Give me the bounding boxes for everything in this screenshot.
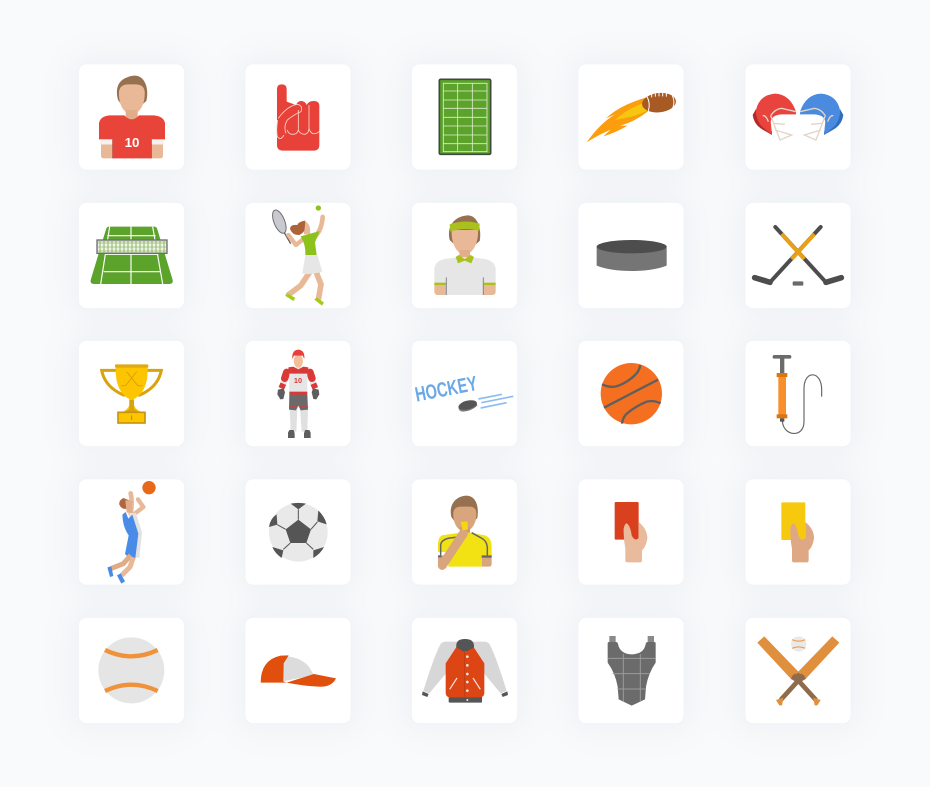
icon: gold trophy: [102, 364, 161, 423]
card panel: [245, 340, 351, 446]
card panel: [412, 479, 518, 585]
icon: varsity jacket: [422, 639, 508, 703]
card panel: [412, 618, 518, 724]
card: varsity jacket: [412, 618, 518, 724]
card panel: [245, 618, 351, 724]
icon: air pump: [773, 355, 822, 433]
card: yellow card in hand: [745, 479, 851, 585]
icon: red card in hand: [615, 502, 647, 562]
card panel: [745, 340, 851, 446]
card: tennis player: [245, 202, 351, 308]
icon: tennis man: [434, 215, 496, 295]
card panel: [578, 340, 684, 446]
card: american football field: [412, 64, 518, 170]
card panel: [245, 202, 351, 308]
card panel: [578, 64, 684, 170]
card panel: [412, 202, 518, 308]
card: foam finger: [245, 64, 351, 170]
icon: soccer ball: [269, 503, 328, 562]
card panel: [745, 618, 851, 724]
card: basketball player jumping: [78, 479, 184, 585]
icon: baseball: [98, 637, 164, 703]
card panel: [78, 479, 184, 585]
icon: crossed bats and ball: [757, 636, 839, 705]
icon: basketball: [601, 363, 662, 424]
card: red and blue helmets: [745, 64, 851, 170]
card: air pump: [745, 340, 851, 446]
icon: foam finger: [277, 84, 319, 151]
icon: basketball player: [107, 481, 156, 584]
card: gold trophy: [78, 340, 184, 446]
icon: hockey puck: [597, 240, 667, 271]
card panel: [78, 340, 184, 446]
card: basketball: [578, 340, 684, 446]
card panel: [745, 202, 851, 308]
icon: crossed hockey sticks: [755, 227, 841, 286]
card panel: [245, 479, 351, 585]
icon: baseball cap: [261, 655, 336, 687]
icon: referee: [438, 496, 492, 567]
card panel: [578, 618, 684, 724]
card panel: [412, 64, 518, 170]
icon: helmets: [753, 94, 843, 140]
card: crossed baseball bats: [745, 618, 851, 724]
card panel: [578, 479, 684, 585]
icon: chest protector: [608, 636, 656, 706]
soft halos behind cards: [66, 52, 863, 735]
card: hockey lettering and puck: [412, 340, 518, 446]
card panel: [78, 202, 184, 308]
blue helmet: [800, 94, 843, 140]
card panel: [745, 64, 851, 170]
card panel: [78, 64, 184, 170]
card: red card in hand: [578, 479, 684, 585]
icon: tennis player: [270, 205, 324, 306]
card panel: [245, 64, 351, 170]
icon: flaming football: [587, 91, 677, 142]
icon: red jersey player: 10: [125, 135, 139, 150]
card: flaming football: [578, 64, 684, 170]
card: tennis court: [78, 202, 184, 308]
card panel: [745, 479, 851, 585]
icon: tennis court: [91, 227, 173, 284]
card: hockey player: [245, 340, 351, 446]
card: catcher's chest protector: [578, 618, 684, 724]
card: soccer ball: [245, 479, 351, 585]
card panel: [578, 202, 684, 308]
card: baseball: [78, 618, 184, 724]
icon: hockey player: 10: [294, 376, 302, 385]
card: referee with whistle: [412, 479, 518, 585]
card panel: [78, 618, 184, 724]
red helmet: [753, 94, 796, 140]
card panel: [412, 340, 518, 446]
card: tennis man with headband: [412, 202, 518, 308]
icon: hockey lettering with puck: HOCKEY: [413, 372, 479, 407]
icon: football field: [439, 79, 491, 154]
card: red jersey player: [78, 64, 184, 170]
icon: yellow card in hand: [781, 502, 814, 562]
card: hockey puck: [578, 202, 684, 308]
card: crossed hockey sticks: [745, 202, 851, 308]
card: baseball cap: [245, 618, 351, 724]
